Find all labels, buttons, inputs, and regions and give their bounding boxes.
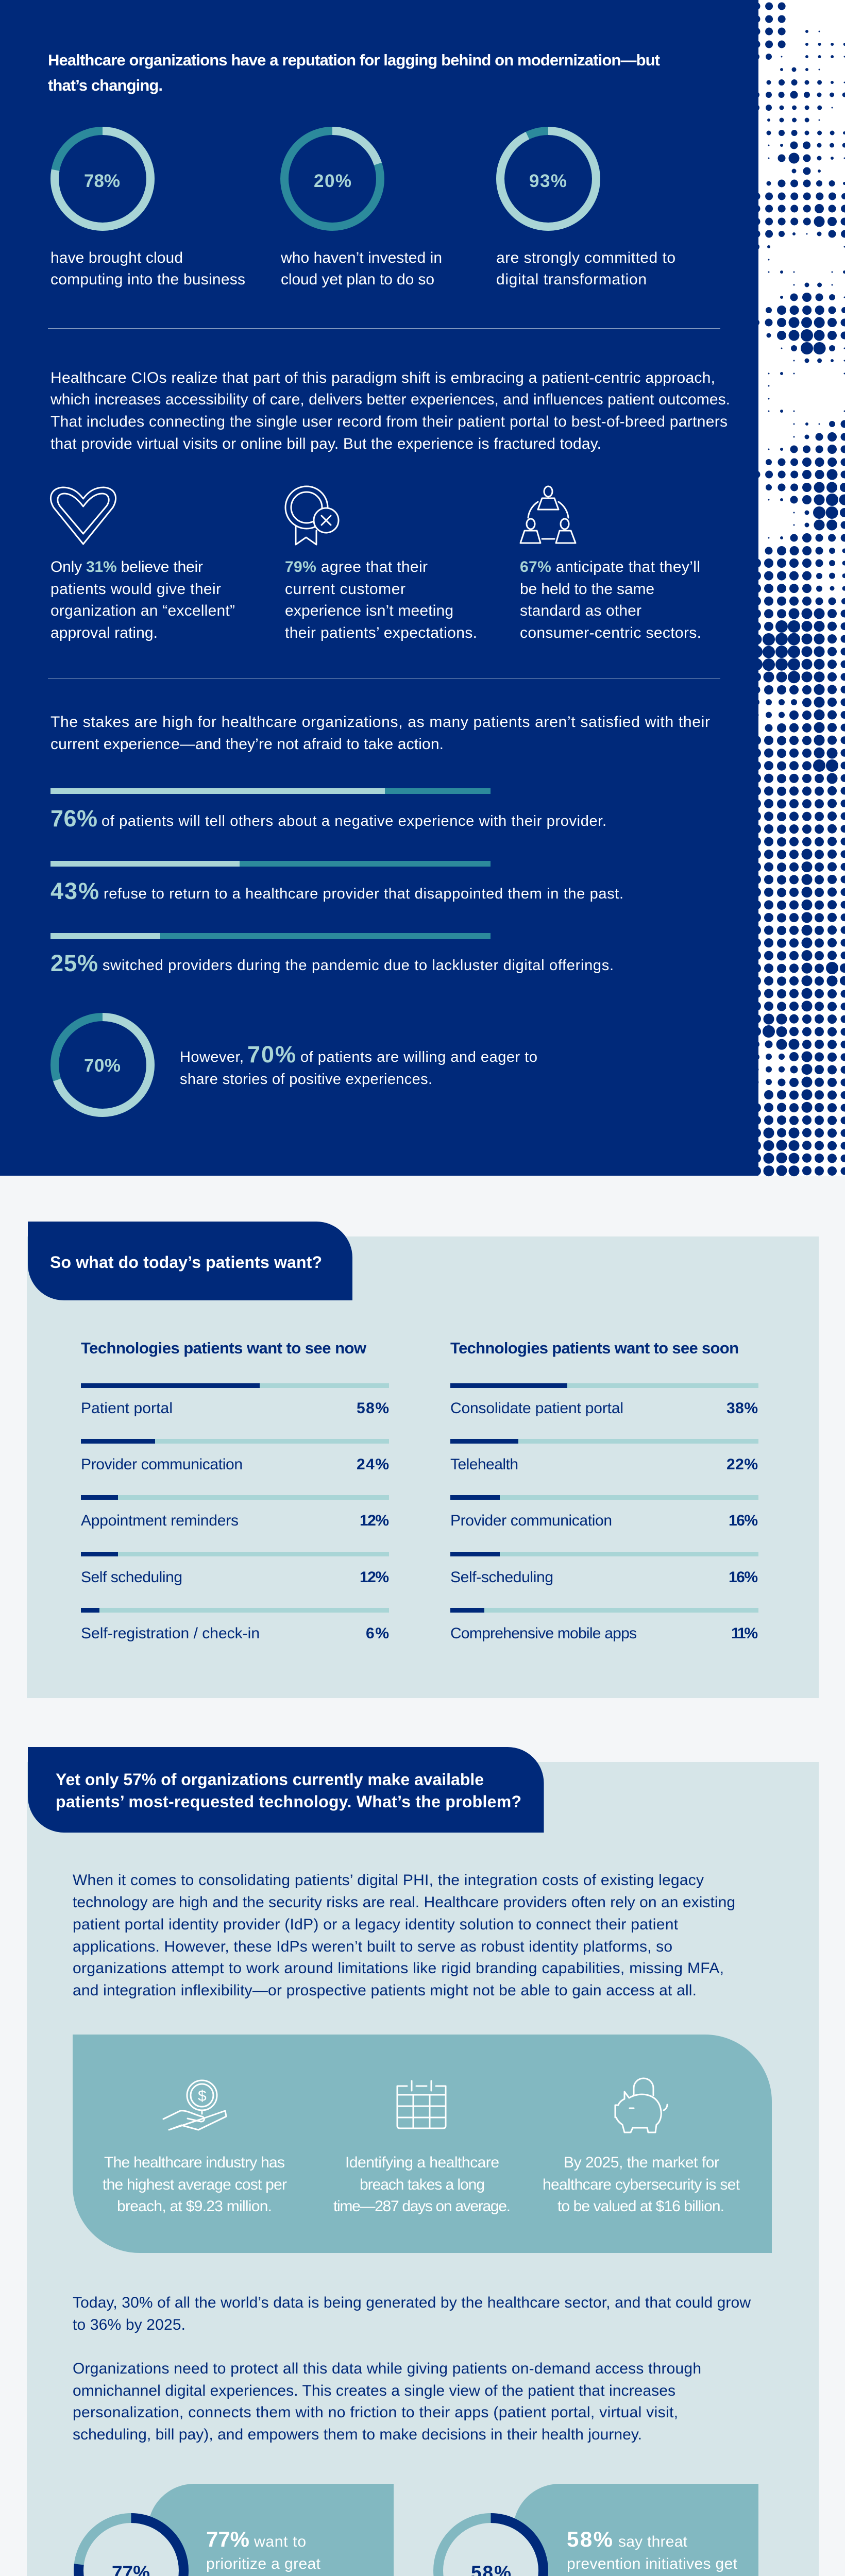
bar stat: 43%: 43%	[50, 878, 99, 904]
column: see now: 12%	[360, 1569, 389, 1586]
paragraph: integration costs: and integration inflexibility—or prospective patients might not be able to gain access at all.	[73, 1982, 697, 1999]
text: 70% positive stories: However,	[180, 1049, 244, 1065]
paragraph: protect data: personalization, connects them with no friction to their apps (patient portal, virtual visit,	[73, 2404, 678, 2421]
stat card: 58%	[438, 2484, 758, 2576]
column: see now: 24%	[357, 1456, 389, 1473]
stat card: 77%: want to	[254, 2533, 306, 2550]
column: see soon: 11%	[731, 1625, 758, 1642]
tab heading: Yet only 57% of organizations currently make available	[56, 1770, 484, 1789]
stat: 67% same standard: consumer-centric sectors.	[520, 624, 701, 641]
column: see soon: Telehealth	[450, 1456, 518, 1473]
donut captions: cloud yet plan to do so	[281, 271, 434, 288]
column: see now: 6%	[366, 1625, 389, 1642]
callout text: market size: to be valued at $16 billion.	[557, 2198, 724, 2215]
bar stat: 25%: switched providers during the pandemic due to lackluster digital offerings.	[103, 957, 614, 974]
donut: 70%: 70%	[84, 1056, 121, 1076]
stat card: 58%: prevention initiatives get	[567, 2555, 738, 2572]
donut: 93%: 93%	[529, 171, 567, 191]
donut: 93%	[500, 131, 596, 227]
stat: 67% same standard: be held to the same	[520, 581, 654, 598]
panel: what patients want	[27, 1222, 819, 1698]
stat: 67% same standard: standard as other	[520, 602, 641, 619]
donut captions: have brought cloud	[50, 249, 183, 266]
callout text: cost per breach	[103, 2154, 287, 2215]
tab heading: So what do today’s patients want?	[50, 1253, 322, 1272]
paragraph: integration costs: patient portal identity provider (IdP) or a legacy identity solution to connect their patient	[73, 1916, 679, 1933]
stat card: 77%: prioritize a great	[206, 2555, 321, 2572]
bar stat: 76%: 76%	[50, 805, 97, 832]
stat: 79% expectations: current customer	[285, 581, 405, 598]
donut: 78%	[55, 131, 150, 227]
paragraph: stakes	[50, 714, 710, 753]
bar stat: 43%	[50, 861, 623, 904]
text: 70% positive stories: 70%	[247, 1041, 296, 1067]
tab heading	[28, 1222, 352, 1300]
donut: 70%	[55, 1017, 150, 1113]
callout text: market size: By 2025, the market for	[564, 2154, 719, 2171]
icon: piggy bank	[615, 2078, 667, 2132]
column: see now: Self-registration / check-in	[81, 1625, 260, 1642]
callout text: time to identify	[333, 2154, 511, 2215]
paragraph: protect data: omnichannel digital experiences. This creates a single view of the patient that increases	[73, 2382, 675, 2399]
callout text: time to identify: breach takes a long	[360, 2176, 485, 2193]
paragraph: integration costs: technology are high and the security risks are real. Healthcare providers often rely on an existing	[73, 1894, 735, 1911]
paragraph: patient-centric: that provide virtual visits or online bill pay. But the experience is fractured today.	[50, 435, 601, 452]
donut: 78%: 78%	[84, 171, 120, 191]
bar stat: 76%	[50, 788, 606, 832]
column: see now: Provider communication	[81, 1456, 243, 1473]
paragraph: patient-centric	[50, 369, 730, 452]
stat: 31% approval: approval rating.	[50, 624, 158, 641]
icon: badge with x	[285, 486, 339, 545]
column: see now: Patient portal	[81, 1400, 173, 1417]
paragraph: stakes: current experience—and they’re not afraid to take action.	[50, 736, 444, 753]
stat: 79% expectations: their patients’ expectations.	[285, 624, 477, 641]
stat: 31% approval: patients would give their	[50, 581, 221, 598]
stat: 31% approval	[50, 558, 235, 641]
column: see soon: Technologies patients want to see soon	[450, 1339, 739, 1357]
column: see soon: 38%	[726, 1400, 758, 1417]
column: see soon: 22%	[726, 1456, 758, 1473]
stat: 79% expectations: 79% agree that their	[285, 558, 428, 575]
paragraph: data growth: Today, 30% of all the world’s data is being generated by the healthcare sector, and that could grow	[73, 2294, 751, 2311]
paragraph: stakes: The stakes are high for healthcare organizations, as many patients aren’t satisfied with their	[50, 714, 710, 731]
donut captions: who haven’t invested in	[280, 249, 442, 266]
paragraph: integration costs: applications. However, these IdPs weren’t built to serve as robust identity platforms, so	[73, 1938, 672, 1955]
callout text: market size: healthcare cybersecurity is set	[543, 2176, 740, 2193]
stat: 67% same standard	[520, 558, 701, 641]
column: see soon: 16%	[729, 1512, 758, 1529]
stat: 79% expectations: experience isn’t meeting	[285, 602, 453, 619]
text: 70% positive stories	[180, 1041, 537, 1088]
paragraph: protect data: Organizations need to protect all this data while giving patients on-demand access through	[73, 2360, 701, 2377]
column: see soon: Provider communication	[450, 1512, 612, 1529]
bar stat: 25%	[50, 933, 614, 976]
paragraph: patient-centric: which increases accessibility of care, delivers better experiences, and influences patient outcomes.	[50, 391, 730, 408]
column: see now: 58%	[357, 1400, 389, 1417]
paragraph: integration costs: organizations attempt to work around limitations like rigid branding capabilities, missing MFA,	[73, 1960, 724, 1977]
column: see soon	[450, 1339, 758, 1642]
stat: 31% approval: Only 31% believe their	[50, 558, 203, 575]
donut: 20%: 20%	[314, 171, 351, 191]
donut: 20%	[284, 131, 380, 227]
paragraph: protect data: scheduling, bill pay), and empowers them to make decisions in their health journey.	[73, 2426, 642, 2443]
column: see soon: Self-scheduling	[450, 1569, 553, 1586]
callout text: time to identify: Identifying a healthcare	[345, 2154, 499, 2171]
heading: that’s changing.	[48, 76, 163, 94]
paragraph: protect data	[73, 2360, 701, 2443]
callout text: time to identify: time—287 days on average.	[333, 2198, 511, 2215]
paragraph: patient-centric: Healthcare CIOs realize that part of this paradigm shift is embracing a patient-centric approach,	[50, 369, 715, 386]
paragraph: integration costs	[73, 1872, 735, 1999]
bar stat: 25%: 25%	[50, 950, 98, 976]
column: see soon: 16%	[729, 1569, 758, 1586]
paragraph: integration costs: When it comes to consolidating patients’ digital PHI, the integration costs of existing legacy	[73, 1872, 704, 1889]
donut captions: computing into the business	[50, 271, 245, 288]
paragraph: data growth: to 36% by 2025.	[73, 2316, 185, 2333]
stat: 67% same standard: 67% anticipate that they’ll	[520, 558, 700, 575]
column: see now: 12%	[360, 1512, 389, 1529]
callout: breach costs	[73, 2035, 772, 2253]
column: see now: Technologies patients want to see now	[81, 1339, 367, 1357]
callout text: cost per breach: the highest average cost per	[103, 2176, 287, 2193]
donut captions: digital transformation	[496, 271, 647, 288]
stat card: 58%: say threat	[618, 2533, 688, 2550]
stat card: 77%	[78, 2484, 394, 2576]
callout text: cost per breach: The healthcare industry has	[104, 2154, 285, 2171]
column: see soon: Consolidate patient portal	[450, 1400, 623, 1417]
column: see soon: Comprehensive mobile apps	[450, 1625, 637, 1642]
paragraph: data growth	[73, 2294, 751, 2333]
tab heading: patients’ most-requested technology. What’s the problem?	[56, 1792, 521, 1811]
halftone dot strip: right	[756, 0, 845, 1176]
column: see now	[81, 1339, 389, 1642]
bar stat: 43%: refuse to return to a healthcare provider that disappointed them in the past.	[104, 886, 623, 902]
panel: intro	[0, 0, 758, 1176]
column: see now: Appointment reminders	[81, 1512, 239, 1529]
text: 70% positive stories: of patients are willing and eager to	[300, 1049, 537, 1065]
stat: 79% expectations	[285, 558, 477, 641]
heading	[48, 51, 660, 94]
bar stat: 76%: of patients will tell others about a negative experience with their provider.	[102, 813, 606, 829]
callout text: cost per breach: breach, at $9.23 million.	[117, 2198, 272, 2215]
stat card: 58%: 58%	[567, 2527, 613, 2551]
icon: hand with coin: $	[198, 2088, 207, 2105]
stat: 31% approval: organization an “excellent”	[50, 602, 235, 619]
tab heading	[28, 1747, 544, 1833]
icon: hand with coin	[163, 2080, 226, 2130]
icon: heart	[50, 487, 116, 544]
icon: three people	[520, 486, 576, 543]
panel: what's the problem	[27, 1747, 819, 2576]
donut captions: are strongly committed to	[496, 249, 675, 266]
icon: calendar	[397, 2081, 446, 2128]
text: 70% positive stories: share stories of positive experiences.	[180, 1071, 432, 1088]
column: see now: Self scheduling	[81, 1569, 182, 1586]
donut captions	[50, 249, 675, 288]
callout text: market size	[543, 2154, 740, 2215]
stat card: 77%: 77%	[206, 2527, 249, 2551]
heading: Healthcare organizations have a reputation for lagging behind on modernization—but	[48, 51, 660, 69]
paragraph: patient-centric: That includes connecting the single user record from their patient portal to best-of-breed partners	[50, 413, 728, 430]
